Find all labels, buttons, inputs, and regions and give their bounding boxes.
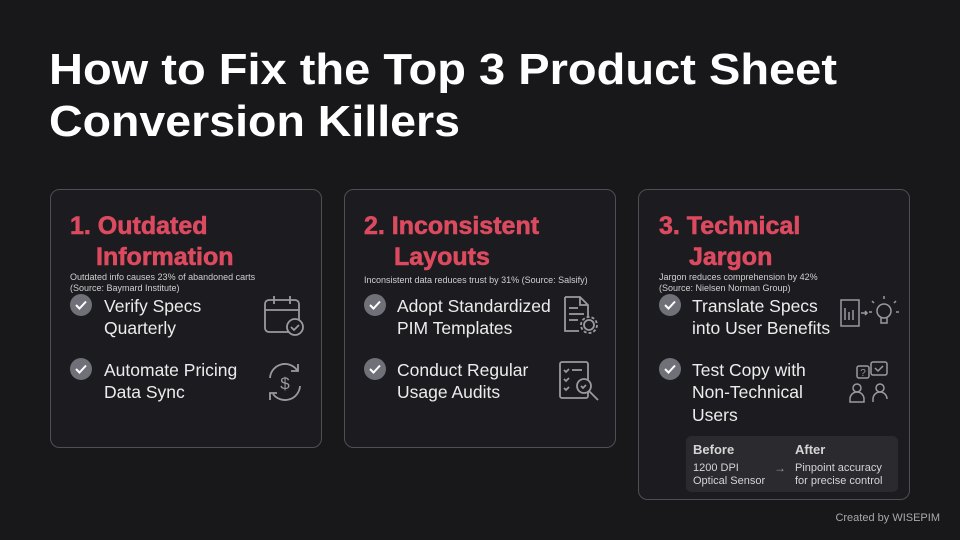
panel: inconsistent layouts (344, 190, 616, 448)
callout: before after (686, 436, 898, 492)
panel: technical jargon (638, 190, 910, 500)
callout: before after: 1200 DPI (693, 462, 739, 474)
heading: technical jargon: 3. Technical (659, 212, 800, 240)
icon: spec to lightbulb (841, 296, 899, 326)
title: How to Fix the Top 3 Product Sheet (49, 45, 837, 94)
heading: inconsistent layouts: Layouts (394, 243, 490, 271)
panel: outdated information (50, 190, 322, 448)
source note 2: Inconsistent data reduces trust by 31% (Source: Salsify) (364, 275, 588, 285)
source note 1: (Source: Baymard Institute) (70, 283, 180, 293)
icon: calendar (265, 296, 303, 335)
source note 3: (Source: Nielsen Norman Group) (659, 283, 791, 293)
icon: users with chat (850, 362, 887, 402)
footer credit: Created by WISEPIM (835, 512, 940, 524)
item: usage audits (364, 358, 528, 402)
callout: before after: Before (693, 442, 734, 457)
heading: outdated information: 1. Outdated (70, 212, 208, 240)
item: translate specs (659, 294, 830, 338)
source note 1: Outdated info causes 23% of abandoned carts (70, 272, 256, 282)
title (49, 45, 837, 146)
item: test copy: Users (692, 405, 738, 425)
item: verify specs: Quarterly (104, 318, 176, 338)
item: translate specs: into User Benefits (692, 318, 830, 338)
icon: checklist magnifier (560, 362, 598, 400)
item: adopt templates: Adopt Standardized (397, 296, 551, 316)
item: test copy (659, 358, 806, 425)
source note 3: Jargon reduces comprehension by 42% (659, 272, 818, 282)
callout: before after: for precise control (795, 475, 882, 487)
source note 1 (70, 272, 256, 293)
item: test copy: Non-Technical (692, 382, 803, 402)
heading: inconsistent layouts (364, 212, 540, 271)
heading: inconsistent layouts: 2. Inconsistent (364, 212, 540, 240)
item: automate pricing: Data Sync (104, 382, 185, 402)
item: automate pricing (70, 358, 237, 402)
heading: outdated information: Information (96, 243, 234, 271)
title: Conversion Killers (49, 97, 460, 146)
item: usage audits: Usage Audits (397, 382, 500, 402)
source note 3 (659, 272, 818, 293)
item: usage audits: Conduct Regular (397, 360, 528, 380)
callout: before after: Pinpoint accuracy (795, 462, 882, 474)
item: verify specs (70, 294, 202, 338)
item: adopt templates: PIM Templates (397, 318, 513, 338)
icon: dollar sync: $ (280, 374, 290, 393)
item: automate pricing: Automate Pricing (104, 360, 237, 380)
callout: before after: Optical Sensor (693, 475, 765, 487)
item: test copy: Test Copy with (692, 360, 806, 380)
callout: before after: After (795, 442, 825, 457)
icon: users with chat: ? (860, 368, 866, 379)
item: verify specs: Verify Specs (104, 296, 202, 316)
heading: technical jargon (659, 212, 800, 271)
item: adopt templates (364, 294, 551, 338)
heading: technical jargon: Jargon (689, 243, 772, 271)
icon: document gear (565, 297, 597, 333)
icon: dollar sync (270, 364, 300, 400)
callout: before after: → (774, 461, 786, 475)
heading: outdated information (70, 212, 234, 271)
item: translate specs: Translate Specs (692, 296, 818, 316)
